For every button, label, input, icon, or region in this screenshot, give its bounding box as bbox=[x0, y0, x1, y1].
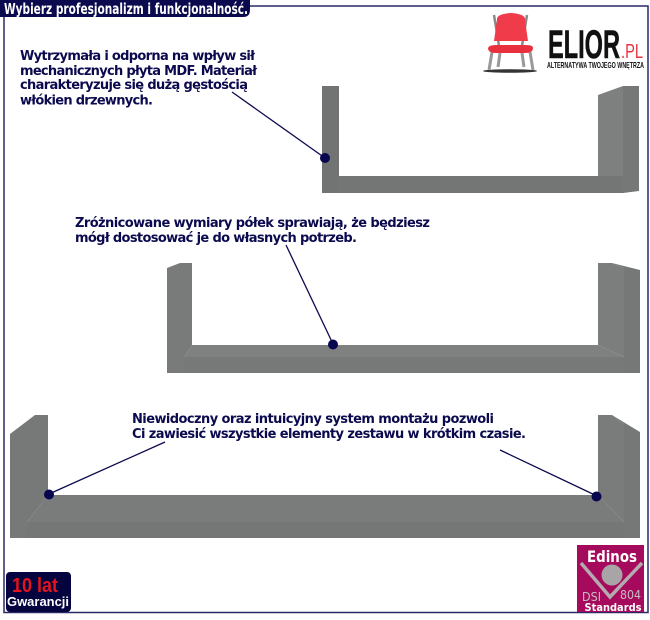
badge: Edinos standards bbox=[577, 545, 644, 614]
callout 1 text: charakteryzuje się dużą gęstością bbox=[20, 78, 248, 93]
badge: 10 lat gwarancji: Gwarancji bbox=[7, 595, 69, 609]
callout 1 leader bbox=[232, 92, 330, 163]
callout 3 text: Niewidoczny oraz intuicyjny system montażu pozwoli bbox=[132, 412, 494, 427]
title banner: Wybierz profesjonalizm i funkcjonalność. bbox=[4, 0, 248, 18]
badge: 10 lat gwarancji bbox=[6, 572, 71, 612]
shelf 2 bbox=[167, 263, 640, 373]
callout 1 text: włókien drzewnych. bbox=[20, 94, 153, 108]
badge: 10 lat gwarancji: 10 lat bbox=[12, 575, 58, 597]
callout 1 text bbox=[20, 49, 258, 108]
callout 3 left leader bbox=[44, 442, 165, 500]
icon: red chair bbox=[483, 13, 537, 73]
callout 3 text bbox=[132, 412, 526, 442]
callout 3 text: Ci zawiesić wszystkie elementy zestawu w krótkim czasie. bbox=[132, 427, 526, 442]
shelf 3 bbox=[10, 415, 640, 538]
callout 2 text: mógł dostosować je do własnych potrzeb. bbox=[75, 231, 357, 246]
logo: Elior.pl bbox=[483, 13, 644, 73]
badge: Edinos standards: Standards bbox=[584, 601, 642, 614]
badge: Edinos standards: DSI bbox=[582, 590, 601, 604]
callout 2 leader bbox=[286, 245, 338, 350]
badge: Edinos standards: 804 bbox=[620, 588, 641, 602]
callout 2 text bbox=[75, 216, 430, 246]
callout 1 text: Wytrzymała i odporna na wpływ sił bbox=[20, 49, 256, 64]
badge: Edinos standards: Edinos bbox=[587, 547, 637, 566]
callout 1 text: mechanicznych płyta MDF. Materiał bbox=[20, 64, 258, 79]
shelf 1 bbox=[322, 86, 639, 193]
callout 2 text: Zróżnicowane wymiary półek sprawiają, że będziesz bbox=[75, 216, 430, 231]
callout 3 right leader bbox=[500, 450, 602, 502]
